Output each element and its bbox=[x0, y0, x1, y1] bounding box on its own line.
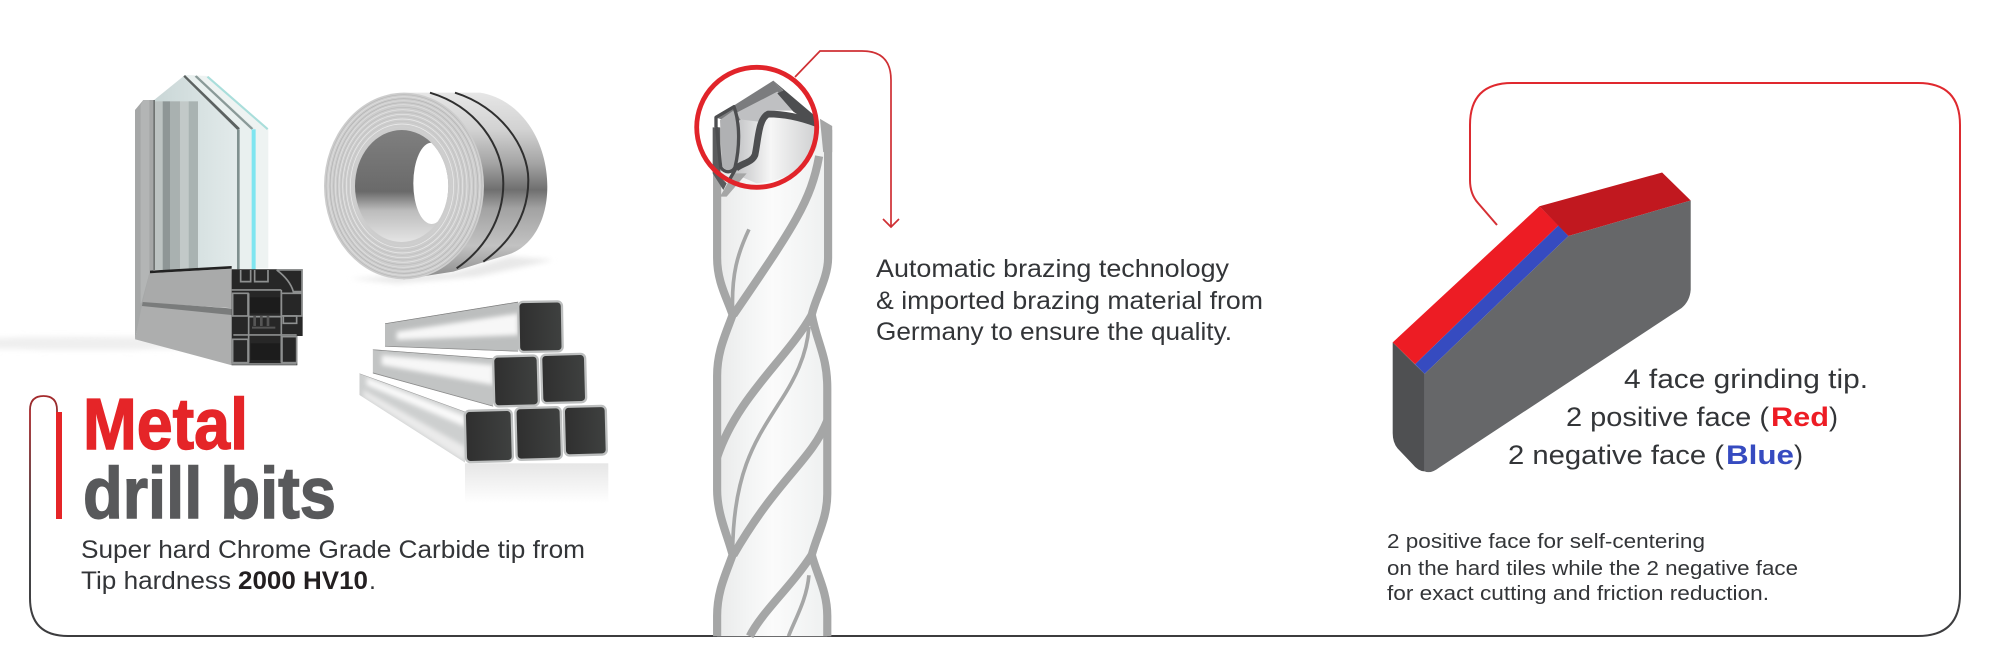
text: tip hardness description: 2000 HV10 bbox=[238, 567, 368, 595]
callout: red circle bbox=[697, 67, 817, 187]
text: face grinding legend: 4 face grinding tip. bbox=[1624, 364, 1868, 394]
tube reflection bbox=[465, 463, 608, 503]
tip negative face bbox=[1415, 225, 1568, 374]
text: brazing description: Automatic brazing technology bbox=[876, 255, 1230, 283]
text: tip hardness description: Super hard Chrome Grade Carbide tip from bbox=[81, 536, 585, 564]
arrow: leader to brazing text bbox=[795, 51, 899, 227]
tip top face bbox=[1539, 173, 1691, 236]
text: brazing description: Germany to ensure the quality. bbox=[876, 318, 1232, 346]
text: face grinding legend: ) bbox=[1829, 402, 1838, 432]
text: face grinding legend: Red bbox=[1771, 402, 1829, 432]
top tube bbox=[385, 302, 518, 352]
heading word: Metal: Metal bbox=[83, 385, 248, 465]
image: square steel tubes bbox=[359, 301, 608, 503]
text: face grinding legend: Blue bbox=[1726, 440, 1794, 470]
text: face function description bbox=[1387, 531, 1798, 605]
text: brazing description bbox=[876, 255, 1263, 346]
text: face function description: on the hard tiles while the 2 negative face bbox=[1387, 558, 1798, 580]
text: tip hardness description: . bbox=[369, 567, 376, 595]
illustration: drill bit bbox=[713, 81, 832, 636]
heading words: drill bits: drill bits bbox=[83, 454, 336, 534]
text: face grinding legend: ) bbox=[1794, 440, 1803, 470]
coil shadow bbox=[350, 257, 553, 283]
text: face function description: for exact cutting and friction reduction. bbox=[1387, 583, 1769, 605]
image: steel coil bbox=[324, 93, 553, 283]
text: face grinding legend: 2 positive face ( bbox=[1566, 402, 1769, 432]
bottom tube bbox=[359, 373, 465, 463]
tip end side bbox=[1393, 342, 1425, 471]
text: face grinding legend bbox=[1508, 364, 1868, 470]
text: face function description: 2 positive face for self-centering bbox=[1387, 531, 1705, 553]
text: brazing description: & imported brazing material from bbox=[876, 287, 1263, 315]
window floor shadow bbox=[0, 337, 233, 350]
drill carbide tip bbox=[713, 81, 817, 197]
panel outline bbox=[30, 83, 1960, 636]
heading bbox=[56, 385, 336, 534]
tip positive face bbox=[1393, 206, 1558, 364]
tip main side bbox=[1425, 200, 1691, 472]
heading accent bar bbox=[56, 412, 62, 519]
text: tip hardness description bbox=[81, 536, 585, 595]
middle tube bbox=[373, 349, 493, 407]
illustration: carbide tip with coloured faces bbox=[1393, 173, 1691, 472]
text: face grinding legend: 2 negative face ( bbox=[1508, 440, 1724, 470]
image: window profile bbox=[0, 75, 303, 365]
text: tip hardness description: Tip hardness bbox=[81, 567, 231, 595]
